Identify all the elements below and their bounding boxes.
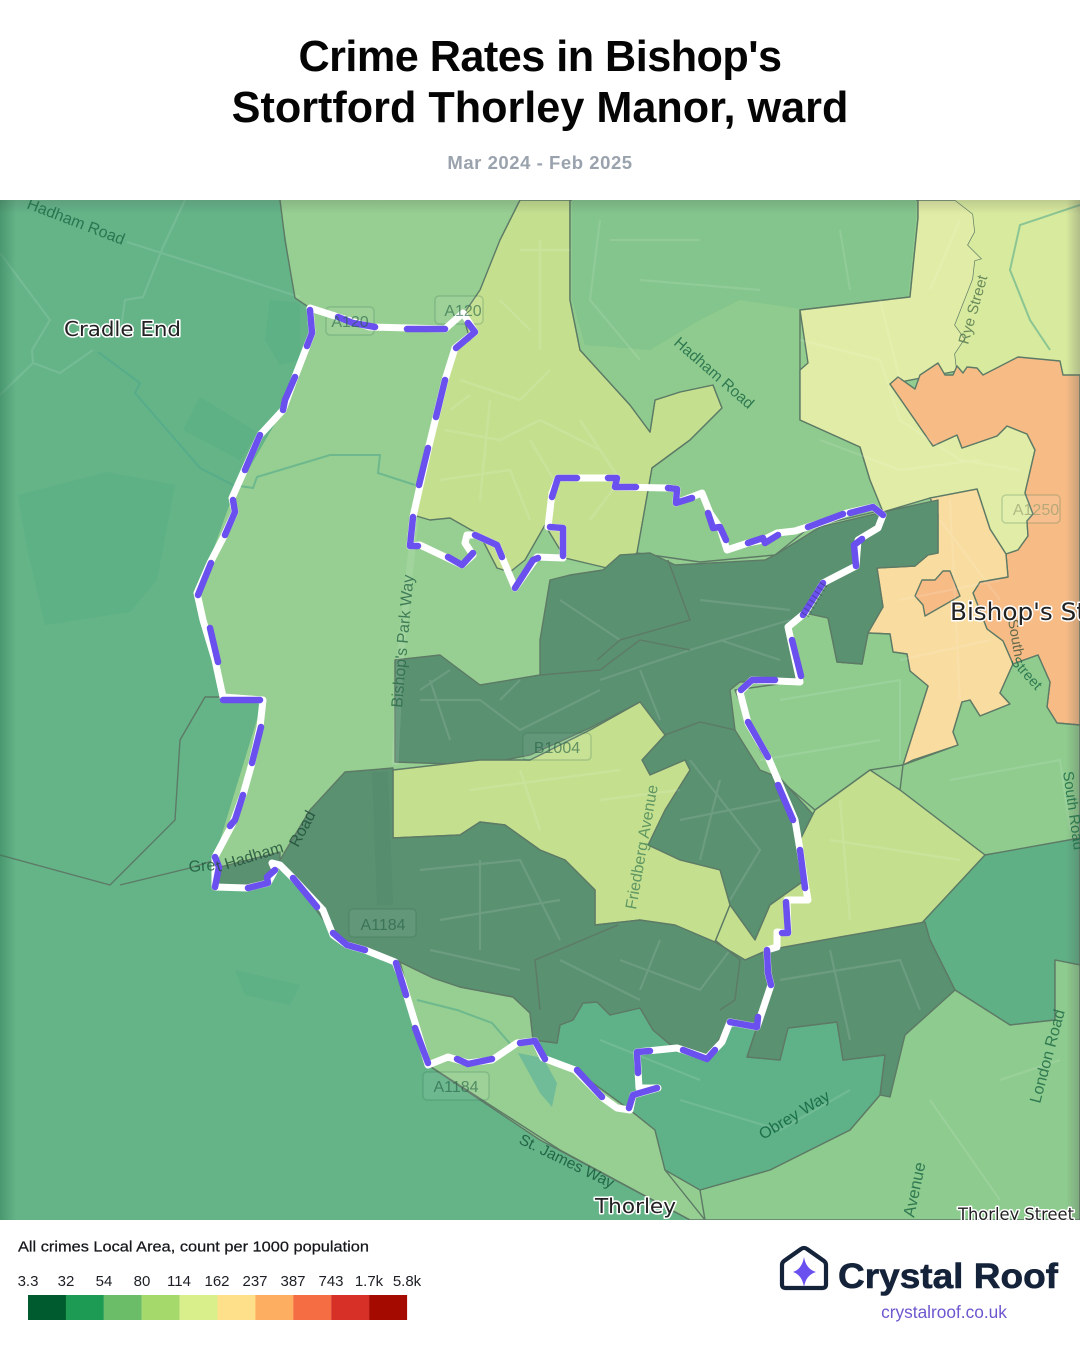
edge vignette [0, 200, 1080, 1220]
road number labels [331, 303, 1059, 1096]
area: south light green strip [400, 962, 705, 1220]
street network [0, 200, 1070, 1200]
area: town peach [867, 489, 1013, 765]
legend values [18, 1273, 422, 1290]
legend values: 3.3 [18, 1273, 38, 1290]
field patches [18, 300, 300, 1005]
area: north green darker fields [572, 200, 916, 350]
area: town centre orange [890, 357, 1080, 725]
stream [98, 205, 1080, 1047]
title [232, 33, 848, 132]
road number labels: B1004 [534, 740, 580, 757]
icon: star [793, 1257, 816, 1287]
west boundary road lines [0, 200, 740, 1220]
area: dark green east [642, 722, 818, 940]
base layer: west countryside [0, 200, 1080, 1220]
road number labels: A1250 [1013, 502, 1059, 519]
dark bypass strip [380, 772, 385, 905]
legend values: 162 [204, 1273, 230, 1290]
legend values: 237 [242, 1273, 268, 1290]
icon: house outline [782, 1248, 826, 1288]
road number badges [326, 296, 1060, 1100]
street labels: Street [1007, 654, 1045, 693]
title: Crime Rates in Bishop's [298, 33, 782, 81]
street labels: St. James Way [516, 1131, 617, 1192]
legend colour scale [28, 1295, 407, 1320]
road number labels: A1184 [360, 917, 406, 934]
area: east green middle [735, 613, 928, 810]
area: south-east light green [700, 960, 1080, 1220]
street labels [25, 196, 1080, 1219]
area: Obrey Way green [533, 1002, 885, 1190]
road number labels: A1184 [433, 1079, 479, 1096]
area: housing yellow-green [413, 200, 722, 572]
lake [518, 1053, 557, 1107]
legend values: 80 [134, 1273, 150, 1290]
place labels: Thorley [594, 1194, 676, 1218]
ward boundary: purple dashes [198, 310, 883, 1108]
ward boundary: white base [197, 308, 883, 1110]
street labels: Obrey Way [756, 1088, 833, 1143]
area: dark green north [395, 500, 938, 765]
road number labels: A120 [444, 303, 482, 320]
wordmark: Crystal Roof [838, 1257, 1058, 1296]
street labels: Road [287, 808, 319, 850]
legend values: 114 [167, 1273, 191, 1290]
street labels: South [1004, 618, 1026, 658]
street labels: t Hadham [214, 839, 286, 876]
street labels: Bishop's Park Way [389, 574, 418, 708]
street labels: Hadham Road [670, 334, 757, 413]
area: peach inner orange [915, 571, 960, 616]
ward and neighbour areas [197, 200, 1080, 1220]
choropleth map [0, 200, 1080, 1220]
legend title: All crimes Local Area, count per 1000 population [18, 1238, 369, 1256]
legend values: 387 [280, 1273, 306, 1290]
area: dark green south [215, 768, 955, 1097]
legend values: 5.8k [393, 1273, 422, 1290]
place labels [64, 317, 1080, 1225]
area: far north-east pale green [955, 200, 1080, 375]
website url: crystalroof.co.uk [881, 1302, 1007, 1322]
street labels: Rye Street [956, 272, 992, 346]
road number labels: A120 [331, 314, 369, 331]
backing light green east of the ward's west edge [197, 200, 1080, 1220]
legend values: 54 [96, 1273, 112, 1290]
place labels: Bishop's St [950, 598, 1080, 626]
title: Stortford Thorley Manor, ward [232, 84, 848, 132]
street labels: London Road [1027, 1008, 1069, 1105]
area: east green lower [900, 655, 1080, 855]
brand logo [780, 1246, 1058, 1322]
street labels: Avenue [900, 1161, 929, 1219]
legend values: 1.7k [355, 1273, 384, 1290]
area: east yellow-green [715, 770, 985, 960]
area: north-west light green [197, 200, 640, 870]
legend [18, 1238, 422, 1320]
legend values: 32 [58, 1273, 74, 1290]
area: north-east pale yellow [800, 200, 1035, 554]
street labels: Friedberg Avenue [623, 784, 662, 911]
street labels: Gre [188, 857, 216, 876]
legend values: 743 [318, 1273, 344, 1290]
area: east darker green [920, 838, 1080, 1025]
area: centre yellow-green [393, 702, 730, 942]
date range subtitle: Mar 2024 - Feb 2025 [447, 152, 633, 173]
railway ticks [805, 582, 825, 615]
place labels: Cradle End [64, 317, 181, 341]
area: north green [570, 200, 918, 562]
